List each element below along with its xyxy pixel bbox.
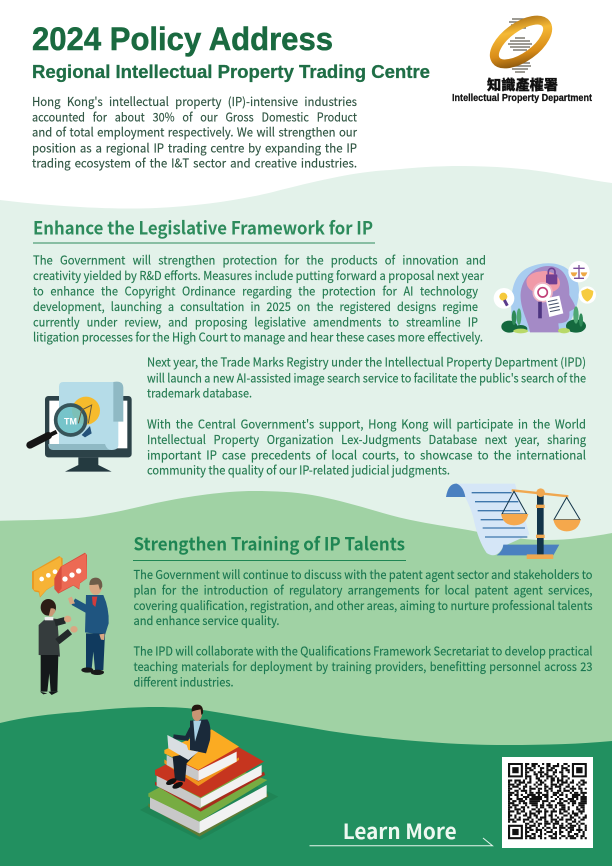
intro text block: Hong Kong's intellectual property (IP)-intensive industries bbox=[32, 93, 357, 110]
intro text block: and of total employment respectively. We will strengthen our bbox=[32, 124, 357, 141]
text block: copyright and designs: The Government will strengthen protection for the products of innovation and bbox=[33, 251, 486, 268]
icon: person reading on stack of books bbox=[140, 705, 278, 840]
title: 2024 Policy Address bbox=[32, 21, 333, 57]
text block: trade marks image search: Next year, the Trade Marks Registry under the Intellectual Property Department (IPD) bbox=[147, 354, 586, 371]
logo: Intellectual Property Department bbox=[452, 12, 593, 104]
text block: Lex-Judgments database: With the Central Government's support, Hong Kong will participate in the World bbox=[147, 415, 586, 432]
label: Learn More with arrow: Learn More bbox=[343, 816, 457, 846]
subtitle: Regional Intellectual Property Trading Centre bbox=[32, 61, 430, 82]
text block: Lex-Judgments database bbox=[147, 415, 586, 479]
icon: two people talking bbox=[32, 553, 109, 695]
icon: head with brain and IP symbols bbox=[494, 261, 596, 333]
text block: copyright and designs bbox=[33, 251, 486, 346]
icon: document and balance scale bbox=[446, 484, 581, 559]
intro text block bbox=[32, 93, 357, 172]
icon: trademark search on monitor bbox=[30, 382, 132, 472]
text block: Lex-Judgments database: important IP case precedents of local courts, to showcase to the international bbox=[147, 446, 586, 463]
intro text block: trading ecosystem of the I&T sector and creative industries. bbox=[32, 155, 357, 172]
text block: copyright and designs: currently under review, and proposing legislative amendments to streamline IP bbox=[33, 313, 478, 330]
intro text block: accounted for about 30% of our Gross Domestic Product bbox=[32, 109, 357, 126]
panel: legislative framework bbox=[30, 214, 596, 559]
background wave: mid green bbox=[0, 491, 612, 866]
label: Learn More with arrow bbox=[310, 816, 492, 846]
intro text block: position as a regional IP trading centre by expanding the IP bbox=[32, 139, 357, 156]
logo: Intellectual Property Department: 知識產權署 bbox=[487, 75, 558, 95]
text block: Lex-Judgments database: Intellectual Property Organization Lex-Judgments Database next year, sharing bbox=[147, 431, 586, 448]
background wave: dark green bbox=[0, 707, 612, 866]
text block: copyright and designs: development, launching a consultation in 2025 on the registered designs regime bbox=[33, 298, 478, 315]
heading: Enhance the Legislative Framework for IP: Enhance the Legislative Framework for IP bbox=[33, 214, 373, 240]
panel: training of IP talents bbox=[32, 531, 593, 695]
text block: trade marks image search bbox=[147, 354, 586, 402]
text block: teaching materials: different industries. bbox=[134, 674, 234, 691]
heading: Strengthen Training of IP Talents: Strengthen Training of IP Talents bbox=[134, 531, 405, 557]
text block: teaching materials bbox=[134, 643, 592, 691]
header panel bbox=[32, 12, 593, 172]
text block: patent agent regulation: and enhance service quality. bbox=[134, 612, 280, 629]
text block: copyright and designs: creativity yielded by R&D efforts. Measures include putting forward a proposal next year bbox=[33, 267, 484, 284]
text block: patent agent regulation bbox=[134, 566, 593, 629]
text block: copyright and designs: to enhance the Copyright Ordinance regarding the protection for AI technology bbox=[33, 282, 479, 299]
logo: Intellectual Property Department: Intellectual Property Department bbox=[452, 93, 593, 104]
text block: Lex-Judgments database: community the quality of our IP-related judicial judgments. bbox=[147, 462, 450, 479]
text block: trade marks image search: trademark database. bbox=[147, 385, 252, 402]
icon: trademark search on monitor: TM bbox=[64, 417, 77, 427]
text block: copyright and designs: litigation processes for the High Court to manage and hear these cases more effectively. bbox=[33, 329, 483, 346]
QR code bbox=[502, 757, 593, 848]
panel: footer bbox=[140, 705, 593, 848]
